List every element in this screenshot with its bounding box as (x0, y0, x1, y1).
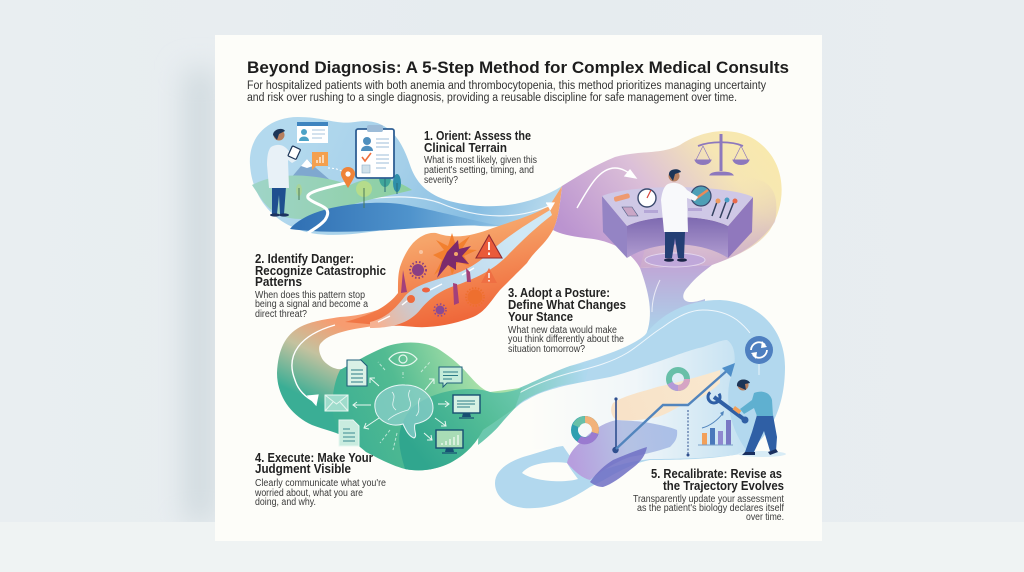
step 3 text block: 3. Adopt a Posture: (508, 286, 610, 300)
console controls (613, 186, 738, 219)
step 2 text block: being a signal and become a (255, 299, 368, 310)
icon: small cells (401, 262, 484, 316)
step 5 text block: the Trajectory Evolves (663, 479, 784, 493)
step 4 text block: doing, and why. (255, 497, 316, 508)
illustration: step 1 orient scene (252, 122, 500, 233)
step 1 text block: 1. Orient: Assess the (424, 129, 531, 143)
floor ellipse (645, 253, 705, 267)
step 3 text block: you think differently about the (508, 334, 624, 345)
icon: chat bubble (439, 367, 462, 387)
figure: doctor with tablet (267, 129, 301, 217)
icon: monitor with text (453, 395, 480, 418)
flow ribbon: step 1 blue region (250, 117, 562, 235)
step 5 text block: Transparently update your assessment (633, 494, 784, 505)
title: Beyond Diagnosis: A 5-Step Method for Complex Medical Consults (247, 58, 789, 77)
step 2 text block: 2. Identify Danger: (255, 252, 354, 266)
step 4 text block: 4. Execute: Make Your (255, 451, 373, 465)
icon: trees (296, 167, 401, 208)
icon: winding road (308, 182, 350, 233)
figure: worker with wrench (708, 380, 778, 455)
icon: river of blood flow (370, 210, 552, 328)
icon: refresh circle (745, 336, 773, 364)
icon: profile card (297, 122, 328, 143)
subtitle: For hospitalized patients with both anemia and thrombocytopenia, this method prioritizes managing uncertainty (247, 80, 766, 92)
figure: doctor at console (661, 169, 698, 262)
white river arrow along ribbon (292, 168, 636, 405)
step 4 text block: worried about, what you are (254, 488, 363, 499)
step 2 text block (255, 252, 386, 320)
step 1 text block: patient's setting, timing, and (424, 165, 534, 176)
icon: donut bottom (574, 420, 596, 441)
icon: top document (347, 360, 367, 386)
flow ribbon: step 4 green region (332, 342, 522, 470)
flow ribbon: step 2 orange region (345, 186, 562, 327)
step 3 text block: Your Stance (508, 310, 573, 324)
icon: map pin (341, 167, 355, 188)
step 5 text block (633, 467, 784, 523)
icon: clipboard (356, 125, 394, 178)
step 3 text block: Define What Changes (508, 298, 626, 312)
step 1 text block: What is most likely, given this (424, 155, 537, 166)
step 2 text block: Patterns (255, 275, 302, 289)
illustration: step 4 brain and outputs (325, 352, 480, 453)
step 5 text block: over time. (746, 512, 784, 523)
hills (252, 176, 412, 219)
peach and violet washes (567, 370, 786, 487)
step 5 text block: as the patient's biology declares itself (637, 503, 784, 514)
icon: large virus cell (419, 233, 477, 278)
illustration: step 2 danger scene (370, 210, 552, 328)
subtitle: and risk over rushing to a single diagnosis, providing a reusable discipline for safe management over time. (247, 92, 737, 104)
step 4 text block: Judgment Visible (255, 462, 351, 476)
step 1 text block (424, 129, 537, 186)
flow ribbon: step 5 recalibrate band (470, 265, 785, 508)
step 4 text block: Clearly communicate what you're (255, 478, 387, 489)
illustration: step 3 control console (602, 134, 753, 267)
step 1 text block: severity? (424, 175, 458, 186)
icon: lower document (339, 420, 359, 446)
icon: balance scale (695, 134, 749, 175)
icon: donut top (669, 370, 687, 388)
step 3 text block (508, 286, 626, 355)
icon: bar chart (698, 411, 733, 445)
step 2 text block: Recognize Catastrophic (255, 264, 386, 278)
subtitle (247, 80, 766, 104)
console body (602, 187, 753, 258)
icon: trajectory arrow chart (612, 363, 735, 456)
icon: envelope (325, 395, 348, 411)
step 3 text block: What new data would make (508, 325, 617, 336)
illustration: step 5 recalibrate scene (567, 336, 786, 487)
step 4 text block (254, 451, 387, 508)
icon: eye (389, 352, 417, 366)
step 2 text block: When does this pattern stop (255, 290, 365, 301)
icon: brain (375, 385, 433, 438)
icon: warning triangles (476, 235, 502, 283)
flow ribbon: step 3 purple region (553, 131, 782, 268)
arrows radiating from brain (353, 362, 449, 450)
step 2 text block: direct threat? (255, 309, 307, 320)
step 5 text block: 5. Recalibrate: Revise as (651, 467, 782, 481)
flow ribbon: tail into step 4 (277, 300, 400, 440)
icon: monitor with chart (436, 430, 463, 453)
panel: infographic sheet (215, 35, 822, 541)
step 1 text block: Clinical Terrain (424, 141, 507, 155)
icon: mountains (285, 159, 345, 200)
icon: orange chart bubble (312, 152, 328, 170)
step 3 text block: situation tomorrow? (508, 344, 585, 355)
